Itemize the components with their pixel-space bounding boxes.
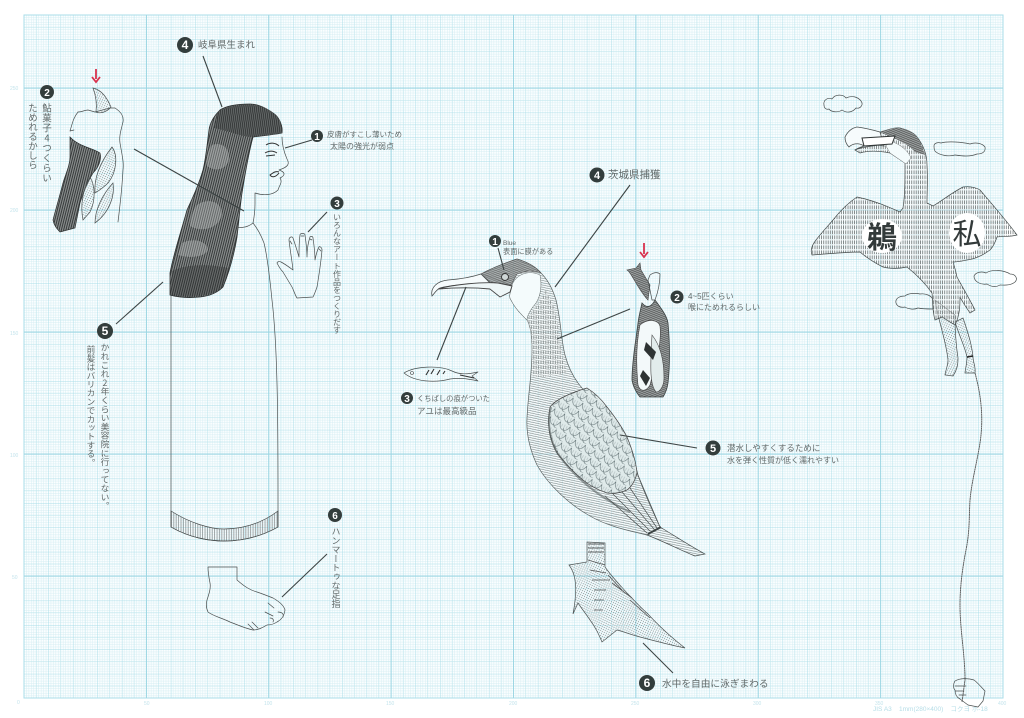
leader line: bird note 1	[498, 248, 504, 270]
kanji circle: me: 私	[952, 211, 982, 253]
cormorant-self figure: right	[811, 127, 1017, 376]
graph paper background: 350	[875, 701, 884, 707]
graph paper background: 50	[144, 701, 150, 707]
note 3: ayu with beak marks: アユは最高級品	[417, 406, 477, 416]
leader line: bird note 4	[555, 185, 630, 287]
graph paper background: 300	[753, 701, 762, 707]
graph paper background: 50	[12, 575, 18, 581]
graph paper background: 100	[264, 701, 273, 707]
right leg	[955, 318, 975, 373]
note 1: thin skin: 太陽の強光が弱点	[330, 141, 394, 151]
note 2: fish in throat	[670, 290, 760, 312]
graph paper background: 150	[10, 331, 19, 337]
leader line: person note 4	[203, 56, 222, 107]
sweets	[95, 147, 116, 193]
note 5: diving feathers: 潜水しやすくするために	[727, 443, 820, 453]
kanji circle: cormorant: 鵜	[867, 213, 897, 257]
person long hair	[170, 104, 282, 298]
note 1: thin skin	[311, 129, 402, 151]
note 2: sweets in the mouth: 2	[44, 88, 50, 99]
icon: cormorant foot	[569, 542, 685, 648]
note 6: swims freely underwater	[639, 675, 769, 691]
beak	[845, 127, 884, 150]
graph paper background: 250	[631, 701, 640, 707]
graph paper background: 200	[10, 208, 19, 214]
person face and neck	[233, 137, 288, 227]
body silhouette	[481, 259, 660, 535]
note 2: sweets in the mouth: 鮎菓子4つくらい	[40, 102, 54, 183]
note 1: blue eye: 表面に膜がある	[503, 247, 553, 256]
person figure: long dress	[171, 223, 278, 541]
icon: cormorant throat full of fish	[627, 263, 670, 397]
note 2: sweets in the mouth	[26, 85, 54, 183]
note 5: hair: 前髪はバリカンでカットする。	[84, 344, 98, 467]
icon: foot	[206, 567, 285, 630]
note 3: ayu with beak marks	[401, 392, 490, 416]
note 6: hammer toe: ハンマートゥな足指	[330, 527, 342, 609]
note 2: fish in throat: 2	[674, 293, 680, 304]
white throat	[886, 141, 911, 164]
note 3: making art: 3	[334, 199, 340, 210]
wing	[549, 388, 637, 493]
leader line: bird note 5	[620, 435, 697, 448]
note 1: thin skin: 皮膚がすこし薄いため	[327, 129, 402, 139]
side hair	[53, 137, 101, 232]
red arrow: throat	[640, 243, 648, 257]
note 4: born in Gifu: 岐阜県生まれ	[198, 39, 256, 51]
icon: ayu fish	[404, 367, 478, 381]
leader line: bird note 3	[437, 287, 466, 360]
graph paper background: 0	[17, 700, 20, 706]
head cap	[880, 128, 925, 155]
leader line: person note 3	[308, 212, 327, 232]
leader line: person note 1	[285, 140, 312, 148]
note 5: hair: 5	[102, 324, 109, 338]
head cap	[481, 259, 541, 285]
note 3: making art: いろんなアート作品をつくりだす	[332, 213, 342, 334]
clouds	[824, 95, 1016, 309]
white throat patch	[510, 273, 541, 320]
leader line: bird note 2	[557, 309, 630, 339]
note 4: born in Gifu: 4	[182, 38, 189, 52]
note 2: sweets in the mouth: ためれるかしら	[26, 103, 40, 170]
tail	[647, 527, 705, 556]
sweet tail	[93, 88, 111, 113]
note 5: diving feathers	[706, 440, 839, 465]
note 1: blue eye: 1	[492, 237, 498, 248]
leader line: person note 2	[134, 149, 244, 211]
left leg	[935, 300, 958, 376]
icon: hand holding rope	[954, 679, 985, 707]
body and wings	[811, 128, 1017, 325]
note 5: hair	[84, 323, 113, 510]
primary feathers	[605, 473, 660, 533]
note 2: fish in throat: 喉にためれるらしい	[688, 302, 760, 312]
note 4: captured in Ibaraki: 4	[594, 170, 601, 182]
cormorant illustration: centre	[432, 259, 705, 556]
note 6: hammer toe: 6	[332, 511, 338, 522]
note 4: captured in Ibaraki: 茨城県捕獲	[608, 168, 661, 181]
note 4: born in Gifu	[177, 37, 256, 53]
lower beak	[438, 283, 512, 297]
note 3: ayu with beak marks: 3	[404, 394, 410, 405]
note 4: captured in Ibaraki	[590, 168, 661, 182]
note 1: blue eye	[489, 235, 553, 256]
leader line: bird note 6	[643, 643, 673, 673]
neck texture	[527, 290, 567, 377]
graph paper background: 400	[998, 701, 1007, 707]
graph paper background: 200	[509, 701, 518, 707]
cormorant rope	[960, 373, 982, 702]
note in beak	[862, 136, 895, 146]
paper specification footer: JIS A3 1mm(280×400) コクヨ ホ-18	[873, 705, 988, 713]
icon: hand	[277, 234, 322, 298]
leader line: person note 6	[282, 554, 327, 597]
note 6: swims freely underwater: 水中を自由に泳ぎまわる	[662, 677, 769, 690]
eye	[502, 274, 508, 280]
note 5: diving feathers: 水を弾く性質が低く濡れやすい	[727, 455, 839, 465]
leader line: person note 5	[116, 282, 163, 324]
note 3: ayu with beak marks: くちばしの痕がついた	[417, 394, 490, 403]
graph paper background: 100	[10, 453, 19, 459]
note 6: swims freely underwater: 6	[644, 676, 651, 690]
upper beak	[432, 274, 490, 296]
note 5: hair: かれこれ2年くらい美容院に行ってない。	[98, 343, 112, 510]
graph paper background: 250	[10, 86, 19, 92]
note 5: diving feathers: 5	[710, 443, 716, 455]
red arrow	[92, 69, 100, 82]
note 1: thin skin: 1	[314, 132, 320, 143]
note 2: fish in throat: 4~5匹くらい	[688, 292, 734, 301]
graph paper background: 150	[386, 701, 395, 707]
note 1: blue eye: Blue	[503, 240, 516, 247]
icon: person side bust with mouth full of sweets	[53, 69, 123, 232]
dress hem	[171, 511, 278, 541]
